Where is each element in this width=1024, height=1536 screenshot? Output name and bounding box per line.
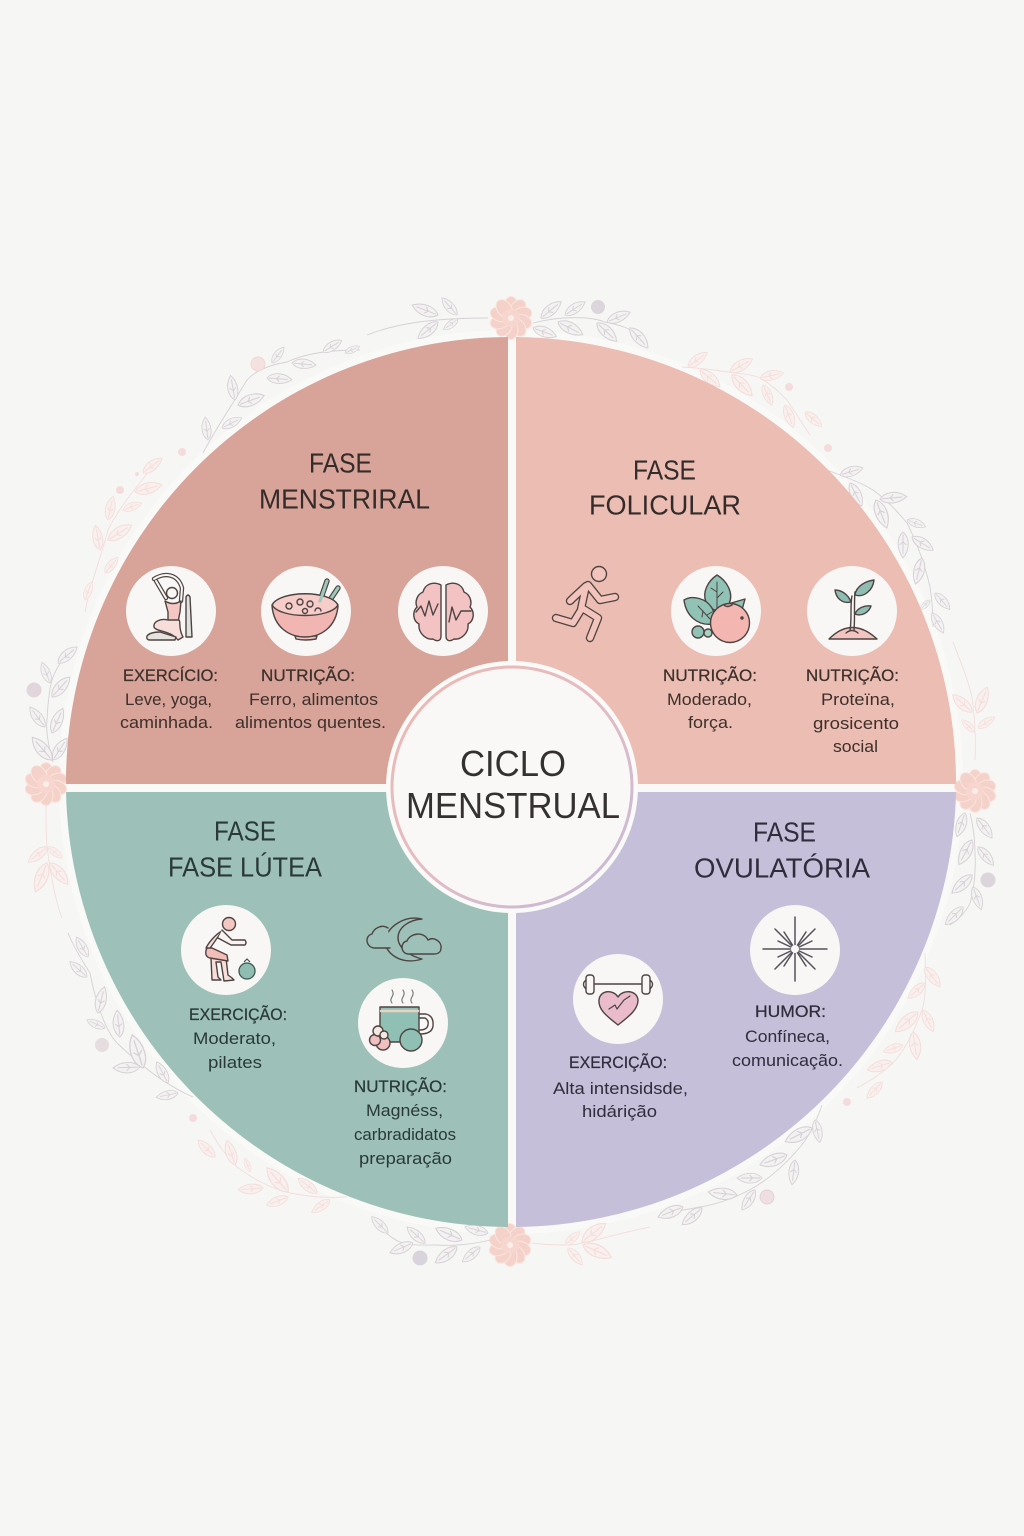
quadrant shape <box>66 792 508 1227</box>
vine: bottom left <box>368 1214 490 1267</box>
panel: fase folicular <box>516 337 956 784</box>
label: nutrição magnéss: NUTRIÇÃO: <box>354 1077 447 1096</box>
vine: upper left, grey <box>201 336 361 453</box>
label: nutrição proteína: Proteïna, <box>821 690 895 709</box>
label: exercição alta intensidade <box>553 1053 688 1121</box>
quadrant shape <box>516 337 956 784</box>
label: nutrição moderado <box>663 666 757 732</box>
heading: FASE <box>753 816 816 848</box>
label: nutrição proteína <box>806 666 899 756</box>
vine: far left, pink <box>81 448 186 612</box>
label: exercição moderato: EXERCIÇÃO: <box>189 1005 287 1024</box>
label: exercição alta intensidade: EXERCIÇÃO: <box>569 1053 667 1072</box>
label: exercição moderato: Moderato, <box>193 1029 276 1048</box>
vine: top left <box>367 295 488 342</box>
label: humor: Confíneca, <box>745 1027 830 1046</box>
label: nutrição moderado: NUTRIÇÃO: <box>663 666 757 685</box>
icon: apple and leaves <box>671 566 761 656</box>
vine: lower left, pink <box>189 1114 347 1216</box>
halo around the disc <box>59 330 963 1234</box>
label: humor <box>732 1002 843 1070</box>
icon: yoga <box>126 566 216 656</box>
panel: fase lútea <box>66 792 508 1227</box>
vine: lower right, pink <box>843 953 944 1106</box>
label: exercício: Leve, yoga, <box>125 690 212 709</box>
heading: FASE LÚTEA <box>168 852 322 882</box>
heading: FASE <box>633 454 696 486</box>
label: nutrição magnéss: preparação <box>359 1149 452 1168</box>
label: nutrição moderado: força. <box>688 713 733 732</box>
icon: brain <box>398 566 488 656</box>
label: exercição alta intensidade: Alta intensidsde, <box>553 1079 688 1098</box>
vine: bottom right <box>532 1219 650 1268</box>
vine: left upper <box>26 643 80 764</box>
label: exercício: caminhada. <box>120 713 213 732</box>
vine: lower right, grey <box>656 1105 824 1229</box>
hub ring <box>392 667 632 907</box>
floral wreath <box>23 295 998 1268</box>
icon: barbell and heart <box>573 954 663 1044</box>
label: exercício <box>120 666 218 732</box>
label: nutrição magnéss <box>354 1077 456 1168</box>
flower: left <box>23 762 69 806</box>
label: nutrição: NUTRIÇÃO: <box>261 666 355 685</box>
panel: fase ovulatória <box>516 792 956 1227</box>
title: MENSTRUAL <box>406 785 620 826</box>
label: nutrição magnéss: Magnéss, <box>366 1101 443 1120</box>
heading: FOLICULAR <box>589 490 741 520</box>
icon: mug <box>358 978 448 1068</box>
flower: bottom <box>487 1223 533 1267</box>
label: nutrição: alimentos quentes. <box>235 713 386 732</box>
icon: runner <box>556 566 615 638</box>
vine: upper right, pink <box>682 349 832 452</box>
center hub <box>386 661 638 913</box>
icon: bowl <box>261 566 351 656</box>
label: exercício: EXERCÍCIO: <box>123 666 218 685</box>
icon: radiant star <box>750 905 840 995</box>
heading: OVULATÓRIA <box>694 852 870 884</box>
heading <box>589 454 741 520</box>
label: nutrição proteína: NUTRIÇÃO: <box>806 666 899 685</box>
heading: MENSTRIRAL <box>259 484 430 514</box>
label: exercição moderato: pilates <box>208 1053 262 1072</box>
vine: top right <box>531 298 652 351</box>
quadrant shape <box>516 792 956 1227</box>
icon: sprout <box>807 566 897 656</box>
vine: right lower <box>942 811 997 928</box>
flower: right <box>952 769 998 813</box>
label: nutrição proteína: grosicento <box>813 714 899 733</box>
heading: FASE <box>214 816 276 846</box>
label: nutrição proteína: social <box>833 737 878 756</box>
icon: squat <box>181 905 271 995</box>
label: exercição alta intensidade: hidárição <box>582 1102 657 1121</box>
title <box>406 743 620 826</box>
icon: moon and clouds <box>367 918 441 961</box>
label: humor: HUMOR: <box>755 1002 826 1021</box>
label: humor: comunicação. <box>732 1051 843 1070</box>
vine: upper right, grey <box>827 463 953 635</box>
vine: lower left, grey <box>67 933 193 1102</box>
label: nutrição magnéss: carbradidatos <box>354 1125 456 1144</box>
label: nutrição moderado: Moderado, <box>667 690 752 709</box>
heading <box>259 448 430 514</box>
label: exercição moderato <box>189 1005 287 1072</box>
vine: right upper <box>949 642 997 760</box>
title: CICLO <box>460 743 566 784</box>
panel: fase menstrual <box>66 337 508 784</box>
heading: FASE <box>309 448 372 478</box>
heading <box>168 816 322 882</box>
label: nutrição <box>235 666 386 732</box>
label: nutrição: Ferro, alimentos <box>249 690 378 709</box>
flower: top <box>488 296 534 340</box>
vine: left lower <box>26 804 72 918</box>
quadrant shape <box>66 337 508 784</box>
heading <box>694 816 870 884</box>
